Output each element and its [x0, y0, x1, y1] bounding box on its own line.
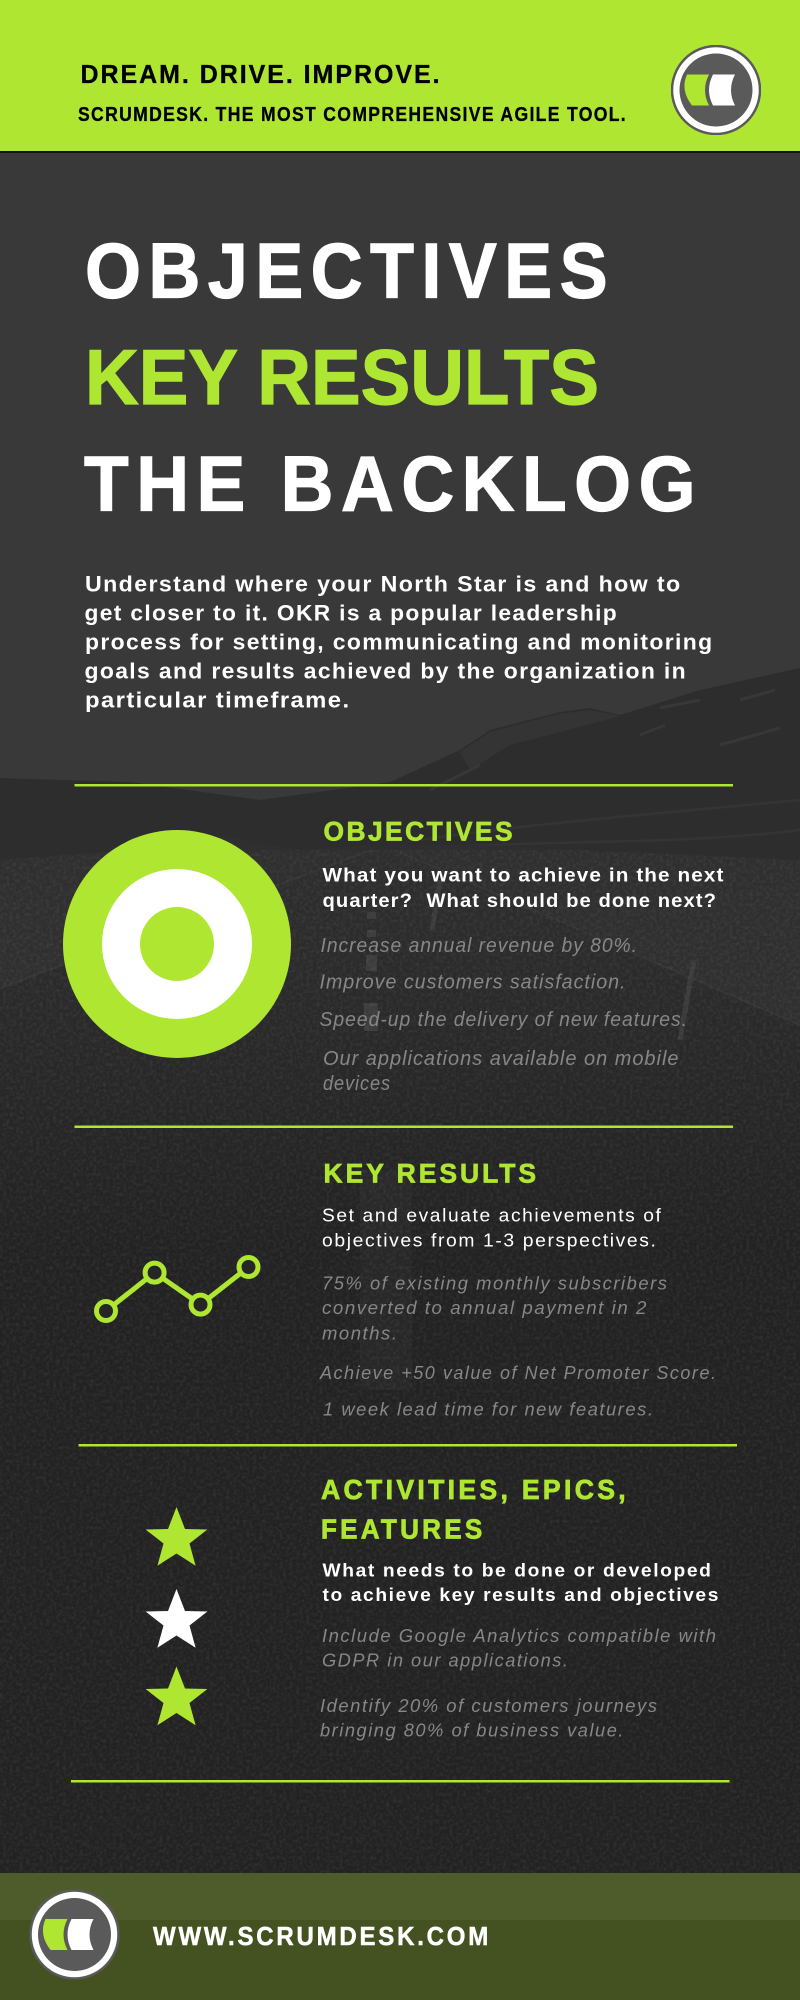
key results list: converted to annual payment in 2 [322, 1298, 648, 1318]
heading: activities, epics, features [321, 1474, 629, 1544]
title [84, 226, 703, 528]
panel: objectives [63, 816, 724, 1095]
heading: objectives: OBJECTIVES [324, 816, 515, 846]
intro paragraph: Understand where your North Star is and how to [85, 572, 682, 596]
objectives list: devices [323, 1073, 391, 1095]
key results description: objectives from 1-3 perspectives. [322, 1230, 658, 1250]
heading: activities, epics, features: FEATURES [321, 1514, 486, 1544]
intro paragraph: goals and results achieved by the organization in [84, 658, 687, 684]
activities list [320, 1626, 718, 1740]
objectives list: Our applications available on mobile [323, 1048, 680, 1070]
top banner [0, 0, 800, 152]
intro paragraph [84, 572, 714, 712]
panel: key results [96, 1158, 718, 1420]
activities description: What needs to be done or developed [322, 1560, 712, 1580]
footer website: WWW.SCRUMDESK.COM [153, 1921, 491, 1951]
activities description: to achieve key results and objectives [322, 1585, 720, 1605]
objectives list: Speed-up the delivery of new features. [320, 1009, 688, 1031]
activities description [322, 1560, 720, 1605]
icon: line chart [96, 1258, 258, 1320]
icon: ScrumDesk logo (footer) [30, 1890, 118, 1978]
intro paragraph: particular timeframe. [85, 688, 350, 712]
objectives description [322, 866, 724, 912]
objectives description: quarter? What should be done next? [322, 891, 717, 912]
title: THE BACKLOG [84, 440, 703, 528]
key results description: Set and evaluate achievements of [322, 1206, 662, 1226]
heading: key results: KEY RESULTS [324, 1158, 539, 1188]
objectives list: Increase annual revenue by 80%. [320, 935, 638, 957]
icon: target [63, 830, 291, 1058]
heading: activities, epics, features: ACTIVITIES, EPICS, [321, 1474, 629, 1505]
key results list: 1 week lead time for new features. [323, 1400, 654, 1420]
icon: three stars [146, 1507, 207, 1725]
activities list: bringing 80% of business value. [320, 1720, 625, 1740]
objectives description: What you want to achieve in the next [322, 866, 724, 886]
activities list: Identify 20% of customers journeys [320, 1696, 658, 1716]
intro paragraph: process for setting, communicating and monitoring [85, 630, 714, 654]
footer [0, 1873, 800, 2000]
objectives list: Improve customers satisfaction. [320, 972, 626, 994]
objectives list [320, 935, 688, 1095]
title: OBJECTIVES [85, 226, 615, 314]
banner subtitle: SCRUMDESK. THE MOST COMPREHENSIVE AGILE TOOL. [78, 104, 627, 126]
banner bottom edge [0, 151, 800, 153]
key results description [322, 1206, 662, 1250]
banner tagline: DREAM. DRIVE. IMPROVE. [80, 61, 442, 89]
activities list: GDPR in our applications. [322, 1650, 570, 1670]
title: KEY RESULTS [85, 333, 599, 421]
intro paragraph: get closer to it. OKR is a popular leadership [84, 600, 618, 626]
icon: ScrumDesk logo (top) [672, 46, 760, 134]
panel: activities, epics, features [146, 1474, 720, 1740]
key results list: Achieve +50 value of Net Promoter Score. [319, 1363, 718, 1383]
key results list: months. [322, 1324, 398, 1344]
key results list: 75% of existing monthly subscribers [322, 1274, 668, 1294]
key results list [319, 1274, 718, 1420]
activities list: Include Google Analytics compatible with [322, 1626, 718, 1646]
